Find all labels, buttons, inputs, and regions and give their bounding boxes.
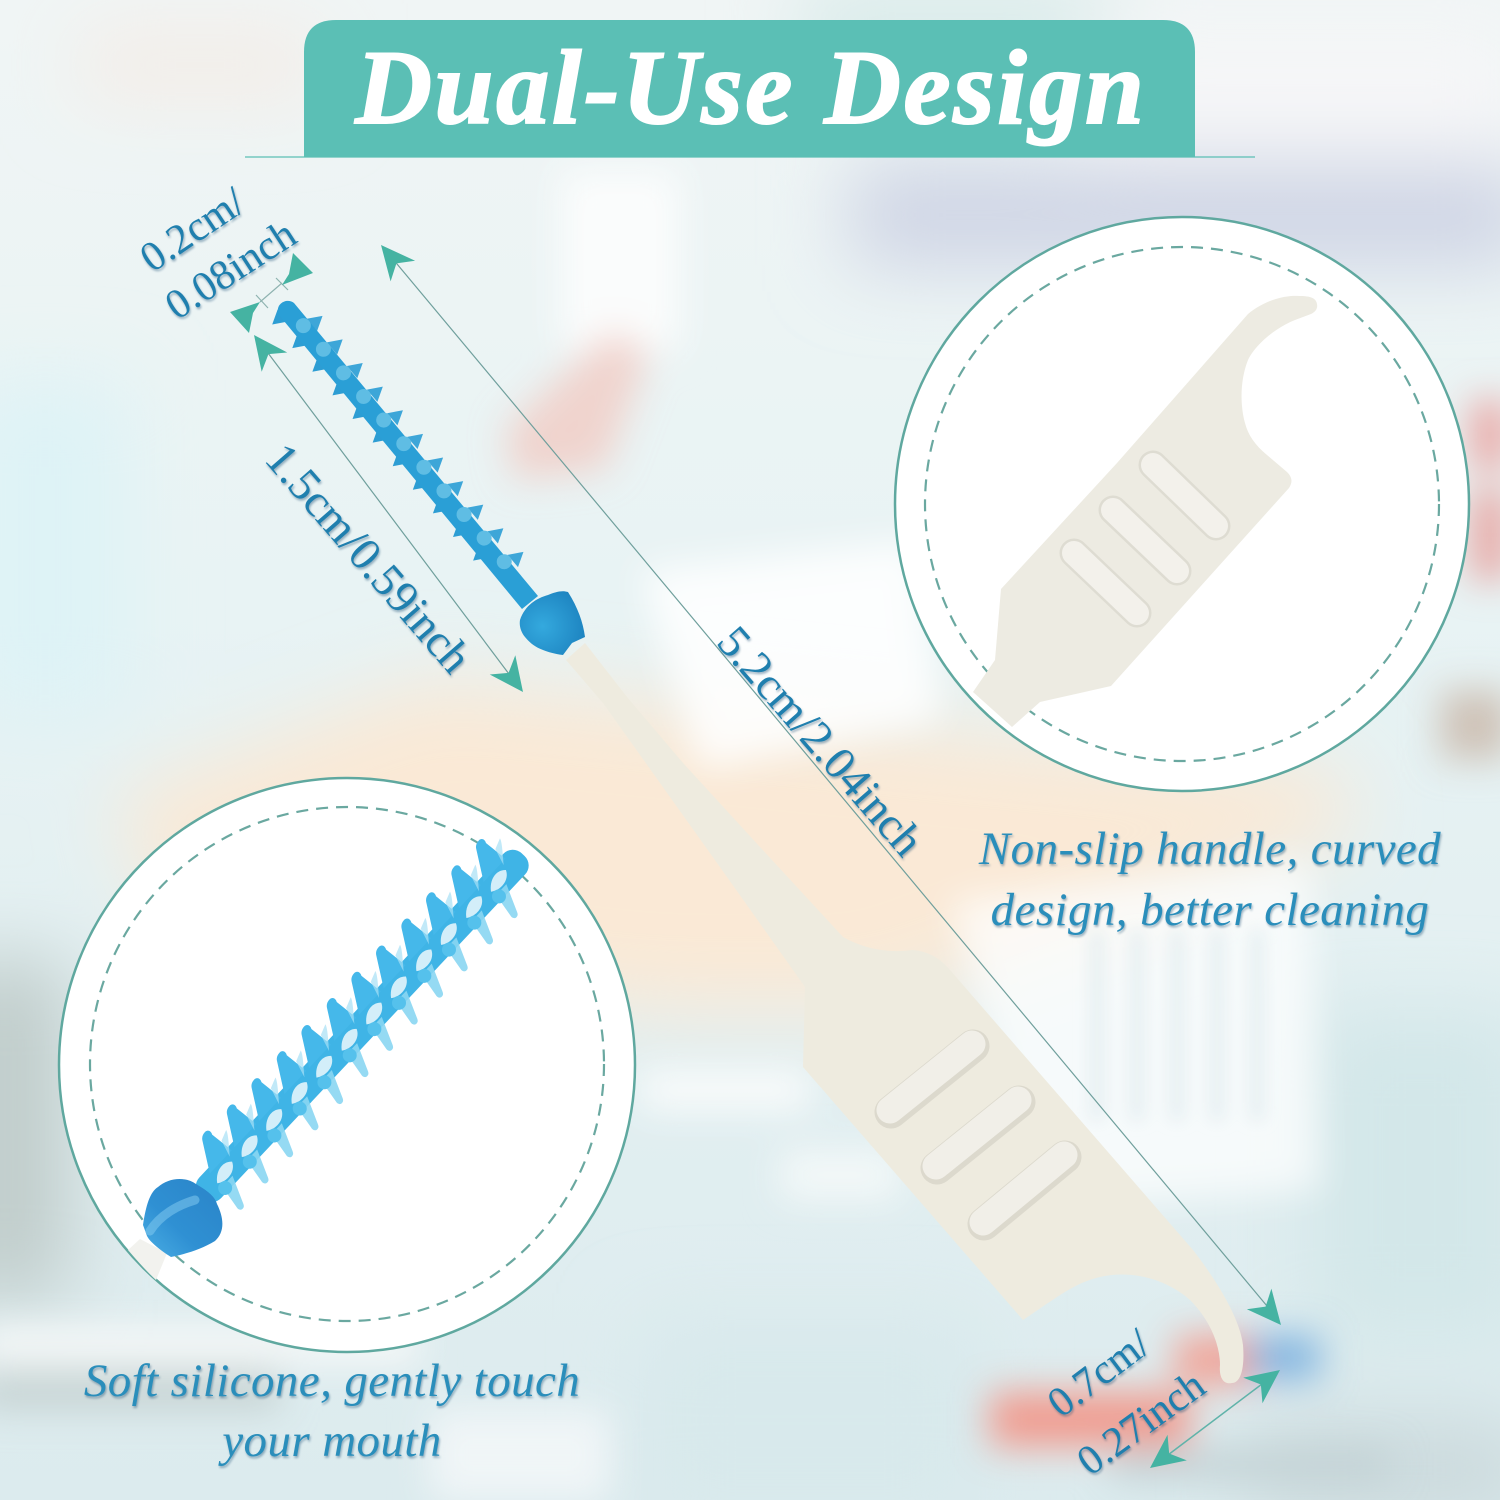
label: 0.2cm/0.08inch: 0.2cm/ — [132, 179, 254, 282]
label: 0.7cm/0.27inch: 0.27inch — [1069, 1362, 1214, 1485]
label: 0.7cm/0.27inch — [1039, 1320, 1214, 1485]
title banner — [245, 20, 1255, 157]
arrow: 5.2cm total length — [369, 235, 1293, 1335]
arrow: 0.7cm hook width — [1140, 1357, 1290, 1481]
icon: magnified curved handle — [973, 296, 1317, 727]
caption: soft silicone — [84, 1355, 580, 1467]
caption: non-slip handle: design, better cleaning — [991, 884, 1429, 936]
caption: non-slip handle — [978, 823, 1441, 936]
panel: top-right detail circle — [895, 217, 1469, 791]
label: 5.2cm/2.04inch: 5.2cm/2.04inch — [708, 616, 934, 866]
label: 0.7cm/0.27inch: 0.7cm/ — [1039, 1320, 1159, 1427]
label: 1.5cm/0.59inch: 1.5cm/0.59inch — [256, 433, 482, 683]
label: 0.2cm/0.08inch — [132, 179, 305, 329]
icon: magnified silicone brush — [128, 826, 551, 1280]
caption: soft silicone: Soft silicone, gently touch — [84, 1355, 580, 1407]
icon: main interdental pick handle — [566, 643, 1243, 1383]
arrow: 1.5cm brush length — [241, 325, 536, 702]
title: Dual-Use Design — [354, 29, 1147, 146]
caption: soft silicone: your mouth — [218, 1415, 442, 1467]
panel: bottom-left detail circle — [59, 778, 635, 1352]
icon: blue silicone brush — [267, 290, 585, 655]
caption: non-slip handle: Non-slip handle, curved — [978, 823, 1441, 875]
arrow: 0.2cm brush width — [230, 253, 313, 333]
label: 0.2cm/0.08inch: 0.08inch — [157, 211, 305, 329]
